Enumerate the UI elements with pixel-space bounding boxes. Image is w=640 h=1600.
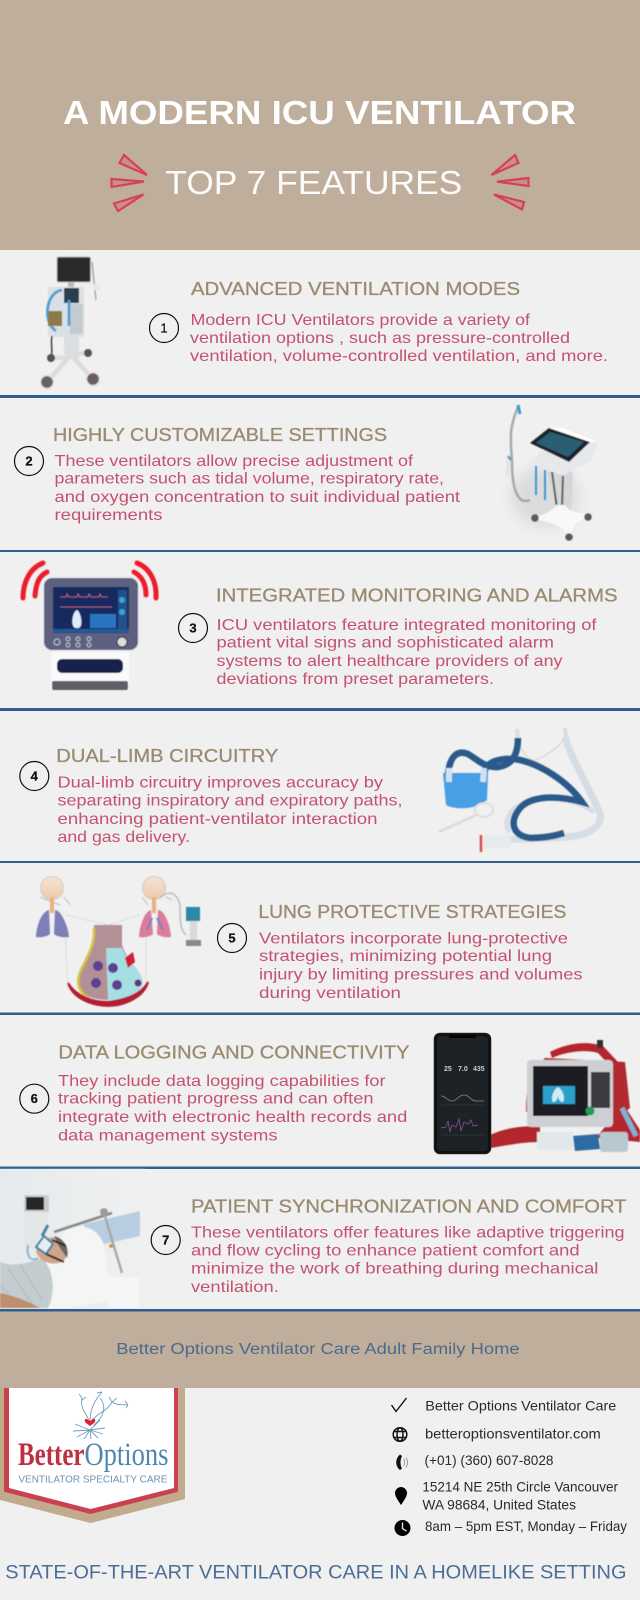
body text 4 <box>58 774 402 846</box>
body text 3: deviations from preset parameters. <box>216 671 494 688</box>
contact: phone: (+01) (360) 607-8028 <box>424 1452 554 1468</box>
icon: ventilator monitor with alarm waves <box>23 563 156 690</box>
tagline: STATE-OF-THE-ART VENTILATOR CARE IN A HOMELIKE SETTING <box>5 1563 627 1584</box>
panel: feature 6 data logging and connectivity <box>0 1015 640 1166</box>
number badge 7: 7 <box>162 1232 169 1248</box>
panel: feature 5 lung protective strategies <box>0 863 640 1012</box>
icon: ventilator on cart <box>40 257 100 388</box>
body text 7: and flow cycling to enhance patient comfort and <box>191 1242 580 1259</box>
number badge 3: 3 <box>189 620 197 636</box>
number badge 7 <box>151 1226 180 1254</box>
number badge 2: 2 <box>25 454 33 468</box>
body text 6: They include data logging capabilities for <box>58 1073 386 1090</box>
number badge 4 <box>20 762 49 790</box>
contact: hours: 8am – 5pm EST, Monday – Friday <box>425 1518 627 1534</box>
body text 2: and oxygen concentration to suit individual patient <box>54 489 461 506</box>
body text 2: These ventilators allow precise adjustment of <box>54 453 414 470</box>
heading 6: DATA LOGGING AND CONNECTIVITY <box>58 1042 409 1062</box>
divider 3 <box>0 708 640 711</box>
number badge 4: 4 <box>31 768 39 784</box>
body text 7: ventilation. <box>191 1279 279 1296</box>
panel: feature 4 dual-limb circuitry <box>0 711 640 861</box>
number badge 5: 5 <box>228 930 236 946</box>
body text 7: These ventilators offer features like adaptive triggering <box>191 1225 624 1242</box>
body text 5: during ventilation <box>259 985 401 1002</box>
contact: address: 15214 NE 25th Circle Vancouver <box>422 1479 618 1495</box>
body text 3 <box>216 617 597 688</box>
body text 5: strategies, minimizing potential lung <box>259 948 552 965</box>
panel: feature 3 integrated monitoring and alarms <box>0 552 640 708</box>
body text 5: Ventilators incorporate lung-protective <box>259 930 568 948</box>
icon: phone app and portable ventilator: 435 <box>473 1066 485 1073</box>
contact: name: Better Options Ventilator Care <box>425 1398 617 1414</box>
divider 7 <box>0 1309 640 1312</box>
logo badge <box>0 1388 185 1523</box>
body text 3: patient vital signs and sophisticated alarm <box>216 634 554 652</box>
number badge 6 <box>20 1084 49 1113</box>
icon: patient in bed with mask <box>0 1169 145 1309</box>
body text 4: Dual-limb circuitry improves accuracy by <box>58 774 383 792</box>
number badge 2 <box>14 446 44 476</box>
logo wordmark: VENTILATOR SPECIALTY CARE <box>18 1474 167 1486</box>
body text 5: injury by limiting pressures and volumes <box>259 966 582 984</box>
divider 2 <box>0 550 640 552</box>
body text 1 <box>190 312 608 365</box>
icon: phone app and portable ventilator: 25 <box>444 1066 452 1073</box>
panel: feature 7 patient synchronization and comfort <box>0 1169 640 1309</box>
divider 6 <box>0 1166 640 1169</box>
body text 4: and gas delivery. <box>58 829 190 846</box>
body text 5 <box>259 930 582 1002</box>
contact: website: betteroptionsventilator.com <box>425 1425 601 1441</box>
title: A MODERN ICU VENTILATOR <box>63 94 576 131</box>
logo wordmark <box>18 1437 168 1486</box>
body text 6 <box>58 1073 407 1144</box>
heading 5: LUNG PROTECTIVE STRATEGIES <box>258 902 566 922</box>
number badge 1 <box>150 314 178 342</box>
icon: right burst <box>492 155 528 210</box>
body text 6: data management systems <box>58 1127 278 1144</box>
divider 4 <box>0 861 640 864</box>
body text 6: tracking patient progress and can often <box>58 1091 374 1108</box>
number badge 5 <box>218 924 246 952</box>
body text 3: ICU ventilators feature integrated monitoring of <box>216 617 597 634</box>
icon: dandelion tree with heart <box>73 1392 128 1439</box>
panel: feature 1 advanced ventilation modes <box>0 250 640 395</box>
body text 7 <box>191 1225 624 1296</box>
body text 2 <box>54 453 461 524</box>
body text 1: ventilation options , such as pressure-controlled <box>190 330 570 347</box>
divider 1 <box>0 395 640 398</box>
body text 6: integrate with electronic health records and <box>58 1109 407 1126</box>
contact: address <box>395 1479 618 1512</box>
icon: lungs and alveolus illustration <box>36 876 201 1006</box>
body text 1: Modern ICU Ventilators provide a variety of <box>190 312 531 329</box>
logo wordmark: Options <box>84 1437 168 1473</box>
body text 3: systems to alert healthcare providers of any <box>216 653 562 670</box>
body text 1: ventilation, volume-controlled ventilation, and more. <box>190 348 608 365</box>
subtitle: TOP 7 FEATURES <box>165 164 462 201</box>
organization name: Better Options Ventilator Care Adult Family Home <box>116 1341 520 1358</box>
heading 7: PATIENT SYNCHRONIZATION AND COMFORT <box>191 1196 626 1216</box>
icon: phone app and portable ventilator <box>434 1033 640 1154</box>
body text 4: enhancing patient-ventilator interaction <box>58 811 378 828</box>
logo wordmark: Better <box>18 1437 84 1473</box>
footer band <box>0 1312 640 1388</box>
number badge 6: 6 <box>31 1091 38 1106</box>
body text 7: minimize the work of breathing during mechanical <box>191 1261 598 1278</box>
number badge 1: 1 <box>160 320 168 336</box>
divider 5 <box>0 1012 640 1015</box>
heading 3: INTEGRATED MONITORING AND ALARMS <box>216 586 618 606</box>
body text 2: parameters such as tidal volume, respiratory rate, <box>54 470 444 488</box>
contact: address: WA 98684, United States <box>422 1496 576 1512</box>
body text 2: requirements <box>54 507 162 524</box>
panel: feature 2 highly customizable settings <box>0 398 640 550</box>
header band <box>0 0 640 250</box>
heading 1: ADVANCED VENTILATION MODES <box>191 279 520 299</box>
icon: left burst <box>112 155 147 211</box>
heading 4: DUAL-LIMB CIRCUITRY <box>56 746 278 766</box>
body text 4: separating inspiratory and expiratory paths, <box>58 792 402 810</box>
icon: phone app and portable ventilator: 7.0 <box>458 1066 468 1073</box>
heading 2: HIGHLY CUSTOMIZABLE SETTINGS <box>53 425 387 445</box>
icon: touchscreen ventilator on cart <box>506 405 598 541</box>
number badge 3 <box>178 614 208 642</box>
contact list <box>392 1398 627 1536</box>
icon: dual-limb breathing circuit <box>439 728 600 852</box>
